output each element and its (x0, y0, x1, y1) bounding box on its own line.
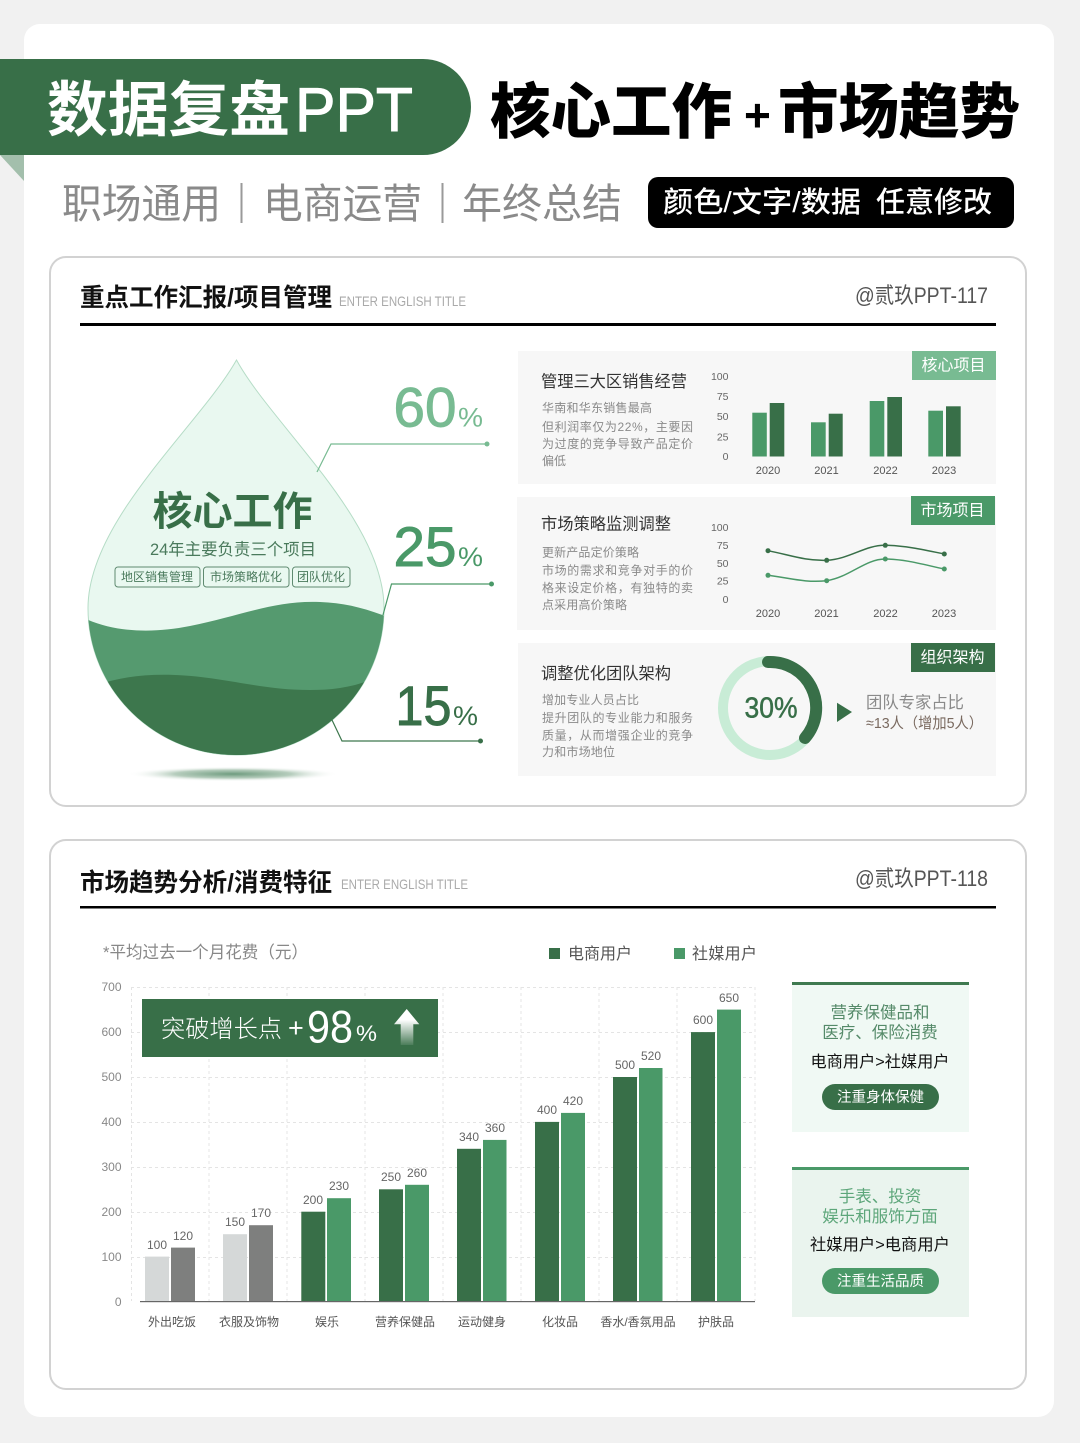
line chart: yearly: 2023 (932, 608, 956, 620)
card body text (542, 692, 693, 759)
bar chart: monthly spend: 600 (101, 1025, 122, 1039)
editable badge: 任意修改 (876, 186, 992, 219)
growth callout: 98 (307, 1002, 353, 1052)
callout 15%: % (453, 701, 478, 731)
bar chart: monthly spend: 200 (101, 1205, 122, 1219)
bar chart: monthly spend: 100 (101, 1250, 122, 1264)
pill: 注重身体保健 (837, 1089, 924, 1106)
donut chart 30%: 30% (744, 692, 798, 724)
expert share label: 团队专家占比 (866, 693, 964, 712)
bar chart: monthly spend: 340 (459, 1130, 479, 1144)
card body text: 华南和华东销售最高 (542, 400, 652, 415)
editable badge (648, 177, 1014, 228)
icon: up arrow (394, 1009, 419, 1045)
bar chart: monthly spend: 400 (537, 1103, 557, 1117)
insight card: e-commerce users (792, 982, 969, 1132)
main title: 核心工作 (490, 79, 732, 146)
line chart: yearly: 2022 (873, 608, 898, 620)
header banner (0, 59, 471, 181)
callout 25%: 25 (394, 515, 456, 578)
card heading: 市场策略监测调整 (541, 516, 671, 534)
callout 15%: 15 (396, 674, 452, 737)
arrow (837, 703, 852, 722)
bar chart: yearly (711, 371, 961, 477)
bar chart: monthly spend: 运动健身 (458, 1314, 506, 1329)
card body text: 为过度的竞争导致产品定价 (542, 436, 693, 451)
card body text: 质量，从而增强企业的竞争 (542, 728, 693, 742)
bar chart: monthly spend: 250 (381, 1170, 401, 1184)
card body text (542, 544, 693, 612)
growth callout: 突破增长点 (161, 1016, 282, 1043)
tag: market project: 市场项目 (920, 502, 985, 520)
panel: market trends (50, 840, 1026, 1389)
tag: organization: 组织架构 (920, 648, 985, 666)
line chart: yearly: 2021 (814, 608, 839, 620)
chart note: *平均过去一个月花费（元） (103, 943, 308, 962)
droplet subheading: 24年主要负责三个项目 (150, 540, 316, 559)
growth callout: + (288, 1013, 304, 1043)
line chart: yearly: 25 (717, 576, 729, 588)
editable badge: 颜色/文字/数据 (663, 186, 861, 219)
donut chart 30% (723, 661, 817, 755)
panel heading: 重点工作汇报/项目管理 (80, 284, 332, 312)
panel heading: 市场趋势分析/消费特征 (80, 869, 332, 897)
card: organization (518, 643, 996, 776)
line chart: yearly: 2020 (756, 608, 780, 620)
card body text (542, 400, 693, 468)
banner title: 数据复盘 (47, 77, 290, 144)
card body text: 提升团队的专业能力和服务 (542, 710, 693, 725)
bar chart: monthly spend: 230 (329, 1179, 349, 1193)
insight card: e-commerce users: 营养保健品和 (830, 1003, 930, 1022)
insight card: social media users: 手表、投资 (839, 1187, 921, 1206)
expert share value: ≈13人（增加5人） (866, 715, 983, 732)
insight card: social media users: 社媒用户>电商用户 (810, 1236, 950, 1254)
bar chart: yearly: 50 (717, 411, 729, 423)
bar chart: monthly spend: 200 (303, 1193, 323, 1207)
bar chart: monthly spend: 娱乐 (315, 1315, 339, 1329)
callout 60%: % (458, 402, 483, 432)
panel: work report (50, 257, 1026, 806)
subtitle tags (62, 181, 622, 227)
bar chart: monthly spend: 0 (115, 1295, 122, 1309)
insight card: social media users: 娱乐和服饰方面 (822, 1207, 938, 1226)
bar chart: monthly spend: 360 (485, 1121, 505, 1135)
bar chart: monthly spend: 500 (101, 1070, 122, 1084)
growth callout (142, 999, 438, 1057)
legend: 社媒用户 (692, 945, 757, 963)
panel code: @贰玖PPT-118 (855, 866, 988, 891)
pill (822, 1084, 939, 1110)
card body text: 点采用高价策略 (542, 597, 627, 612)
english subtitle: ENTER ENGLISH TITLE (339, 293, 466, 309)
droplet heading: 核心工作 (152, 490, 312, 534)
droplet tags: 团队优化 (297, 569, 345, 584)
bar chart: yearly: 2020 (756, 465, 780, 477)
subtitle tags: 职场通用 (62, 181, 221, 227)
bar chart: yearly: 100 (711, 371, 729, 383)
bar chart: monthly spend: 香水/香氛用品 (600, 1315, 676, 1329)
callout 15% (332, 674, 483, 744)
bar chart: yearly: 2021 (814, 465, 839, 477)
callout 25% (383, 515, 494, 615)
card: core project (518, 351, 996, 484)
pill: 注重生活品质 (837, 1273, 924, 1290)
bar chart: yearly: 0 (723, 451, 729, 463)
growth callout: % (356, 1021, 377, 1046)
insight card: social media users (792, 1167, 969, 1317)
bar chart: yearly: 2022 (873, 465, 898, 477)
bar chart: monthly spend: 120 (173, 1229, 193, 1243)
droplet tags: 市场策略优化 (210, 569, 282, 584)
bar chart: monthly spend: 400 (101, 1115, 122, 1129)
pill (822, 1268, 939, 1294)
bar chart: monthly spend: 170 (251, 1206, 271, 1220)
tag: core project: 核心项目 (921, 356, 986, 374)
bar chart: monthly spend: 520 (641, 1049, 661, 1063)
main title: + (744, 89, 771, 141)
bar chart: yearly: 75 (717, 391, 729, 403)
subtitle tags: 年终总结 (462, 181, 622, 227)
bar chart: monthly spend: 600 (693, 1013, 713, 1027)
main title: 市场趋势 (778, 79, 1020, 146)
bar chart: monthly spend: 300 (101, 1160, 122, 1174)
bar chart: monthly spend: 外出吃饭 (148, 1315, 196, 1329)
line chart: yearly: 75 (717, 540, 729, 552)
droplet shadow (127, 766, 339, 782)
card heading: 调整优化团队架构 (541, 665, 671, 683)
bar chart: monthly spend: 500 (615, 1058, 635, 1072)
legend (549, 945, 757, 963)
bar chart: monthly spend: 650 (719, 991, 739, 1005)
bar chart: monthly spend: 护肤品 (698, 1314, 734, 1329)
bar chart: monthly spend: 260 (407, 1166, 427, 1180)
bar chart: yearly: 25 (717, 432, 729, 444)
callout 60%: 60 (394, 376, 456, 438)
main title (490, 79, 1020, 146)
bar chart: monthly spend (101, 980, 755, 1329)
subtitle tags: 电商运营 (263, 181, 422, 227)
bar chart: monthly spend: 150 (225, 1215, 245, 1229)
line chart: yearly: 0 (723, 594, 729, 606)
card body text: 偏低 (542, 453, 566, 468)
card body text: 力和市场地位 (542, 744, 615, 759)
droplet chart (80, 360, 390, 782)
bar chart: monthly spend: 100 (147, 1238, 167, 1252)
tag: core project (912, 351, 996, 380)
callout 25%: % (458, 542, 483, 572)
line chart: yearly: 50 (717, 558, 729, 570)
legend: 电商用户 (568, 945, 632, 963)
droplet tags (115, 567, 350, 587)
card body text: 增加专业人员占比 (542, 692, 639, 707)
card body text: 但利润率仅为22%，主要因 (542, 419, 693, 434)
english subtitle: ENTER ENGLISH TITLE (341, 876, 468, 892)
bar chart: monthly spend: 营养保健品 (375, 1314, 435, 1329)
bar chart: monthly spend: 420 (563, 1094, 583, 1108)
bar chart: monthly spend: 化妆品 (542, 1315, 578, 1329)
panel code: @贰玖PPT-117 (855, 283, 988, 308)
callout 60% (317, 376, 490, 472)
insight card: e-commerce users: 医疗、保险消费 (822, 1023, 938, 1042)
card: market project (517, 496, 996, 630)
tag: market project (911, 496, 995, 525)
droplet tags: 地区销售管理 (121, 569, 193, 584)
banner title: PPT (295, 76, 413, 145)
insight card: e-commerce users: 电商用户>社媒用户 (810, 1053, 950, 1071)
line chart: yearly (711, 522, 956, 620)
card heading: 管理三大区销售经营 (541, 373, 687, 391)
line chart: yearly: 100 (711, 522, 729, 534)
card body text: 市场的需求和竞争对手的价 (542, 562, 693, 578)
bar chart: monthly spend: 衣服及饰物 (219, 1314, 279, 1329)
card body text: 更新产品定价策略 (542, 544, 639, 560)
bar chart: monthly spend: 700 (101, 980, 122, 994)
card body text: 格来设定价格，有独特的卖 (542, 580, 693, 595)
bar chart: yearly: 2023 (932, 465, 956, 477)
tag: organization (911, 643, 995, 672)
